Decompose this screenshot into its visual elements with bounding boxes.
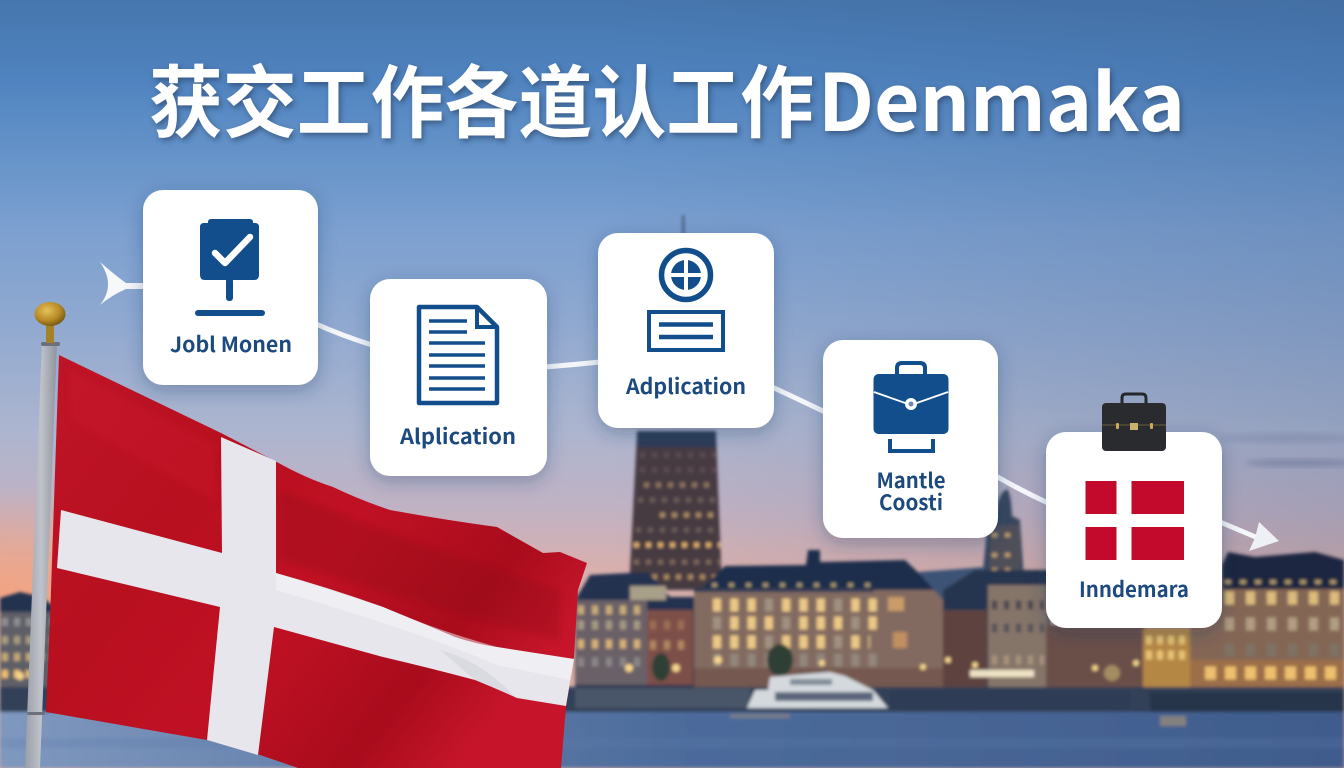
flag cloth bbox=[46, 355, 587, 768]
icon: black briefcase bbox=[1102, 394, 1166, 451]
quay wall bbox=[0, 665, 1344, 713]
arrow: end head bbox=[1249, 522, 1279, 551]
icon: Danish flag squares bbox=[1086, 481, 1184, 560]
domed tower bbox=[982, 489, 1024, 580]
arrow: card 3 to card 4 bbox=[772, 387, 825, 412]
label: Alplication: Alplication bbox=[399, 421, 516, 451]
label: Adplication: Adplication bbox=[625, 371, 746, 401]
card 1: job bbox=[143, 190, 318, 385]
left-edge buildings bbox=[0, 592, 58, 690]
street lights bbox=[16, 656, 1139, 680]
tour boat bbox=[747, 672, 888, 708]
card 2: application document bbox=[370, 279, 547, 476]
label: Inndemara: Inndemara bbox=[1079, 574, 1189, 604]
label: Mantle Coosti: Mantle bbox=[876, 465, 946, 495]
title: Denmaka bbox=[818, 39, 1185, 154]
arrow: card 4 to card 5 bbox=[996, 476, 1048, 503]
flag pole bbox=[25, 302, 66, 768]
card 4: mantle coosti bbox=[823, 340, 998, 538]
flag white cross bbox=[57, 437, 574, 755]
arrow: start tail bbox=[100, 262, 145, 305]
right building bbox=[1190, 552, 1344, 688]
label: Mantle Coosti bbox=[876, 465, 946, 517]
icon: document bbox=[419, 307, 497, 403]
label: Jobl Monen: Jobl Monen bbox=[170, 329, 292, 359]
arrow: card 2 to card 3 bbox=[545, 362, 600, 367]
Danish flag on pole bbox=[25, 302, 587, 768]
card 3: adplication bbox=[598, 233, 774, 428]
trees bbox=[652, 644, 793, 681]
central large building bbox=[694, 550, 944, 690]
icon: signpost with check bbox=[195, 219, 265, 316]
label: Mantle Coosti: Coosti bbox=[879, 487, 943, 517]
city skyline bbox=[0, 215, 1344, 768]
title bbox=[149, 39, 1185, 154]
title: 获交工作各道认工作 bbox=[149, 39, 814, 154]
card 5: denmark bbox=[1046, 394, 1222, 628]
icon: blue briefcase bbox=[874, 363, 948, 451]
river water bbox=[0, 712, 1344, 768]
arrow: card 1 to card 2 bbox=[316, 324, 372, 345]
right-of-centre buildings behind cards bbox=[918, 567, 1193, 690]
connector path with arrows bbox=[100, 262, 1279, 551]
icon: round stamp and form bbox=[649, 250, 723, 350]
flag folds bbox=[280, 490, 560, 640]
arrow: card 5 to end bbox=[1220, 522, 1258, 538]
tower bbox=[629, 215, 722, 590]
building left of main bbox=[575, 572, 694, 690]
